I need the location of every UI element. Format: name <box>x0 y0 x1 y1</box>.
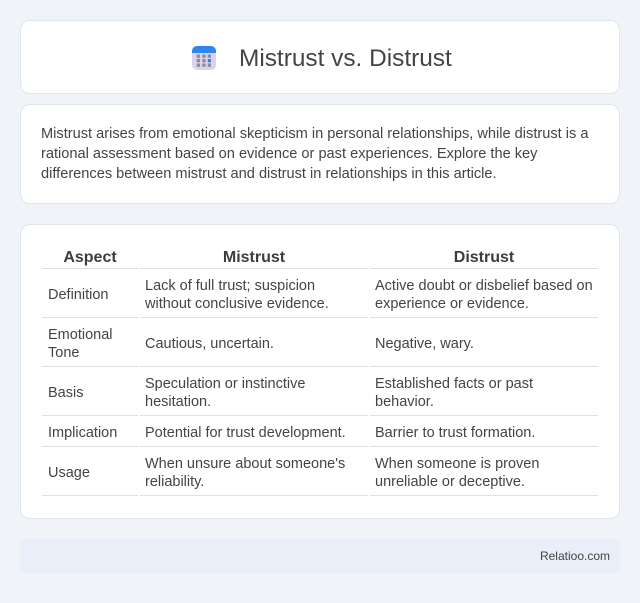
comparison table: Cautious, uncertain. <box>145 336 274 352</box>
comparison table: When unsure about someone's <box>145 456 345 472</box>
row: Emotional Tone <box>48 327 112 361</box>
comparison table: unreliable or deceptive. <box>375 474 525 490</box>
icon: calendar <box>192 46 216 70</box>
table card <box>20 224 620 519</box>
intro card <box>20 104 620 204</box>
row: Emotional Tone: Emotional <box>48 327 112 343</box>
comparison table: When someone is proven <box>375 456 539 472</box>
row: Implication: Implication <box>48 425 117 441</box>
comparison table: Negative, wary. <box>375 336 474 352</box>
row: Definition: Definition <box>48 287 108 303</box>
row: Emotional Tone: Tone <box>48 345 79 361</box>
comparison table: behavior. <box>375 394 434 410</box>
comparison table: Lack of full trust; suspicion <box>145 278 315 294</box>
title: Mistrust vs. Distrust <box>239 45 452 72</box>
footer source: Relatioo.com <box>540 549 610 563</box>
header: Aspect: Aspect <box>63 249 117 266</box>
header: Distrust: Distrust <box>454 249 514 266</box>
intro text: Mistrust arises from emotional skepticism in personal relationships, while distrust is a <box>41 126 588 142</box>
comparison table: without conclusive evidence. <box>145 296 329 312</box>
intro text: rational assessment based on evidence or past experiences. Explore the key <box>41 146 537 162</box>
row: Basis: Basis <box>48 385 83 401</box>
comparison table <box>42 249 598 496</box>
comparison table: hesitation. <box>145 394 211 410</box>
footer bar <box>20 539 620 573</box>
comparison table: Established facts or past <box>375 376 533 392</box>
comparison table: reliability. <box>145 474 204 490</box>
comparison table: Speculation or instinctive <box>145 376 305 392</box>
comparison table: Barrier to trust formation. <box>375 425 535 441</box>
header: Mistrust: Mistrust <box>223 249 285 266</box>
comparison table: Potential for trust development. <box>145 425 346 441</box>
comparison table: Active doubt or disbelief based on <box>375 278 593 294</box>
header card <box>20 20 620 94</box>
intro text <box>41 126 588 182</box>
intro text: differences between mistrust and distrust in relationships in this article. <box>41 166 497 182</box>
comparison table: experience or evidence. <box>375 296 529 312</box>
row: Usage: Usage <box>48 465 90 481</box>
